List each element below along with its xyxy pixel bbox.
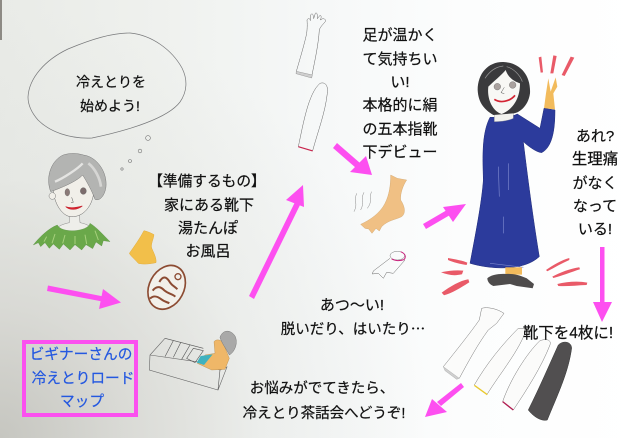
heading: things to prepare: 【準備するもの】 [148,173,266,190]
illustration: toe sock with red cuff [372,251,405,278]
text: feet are warm: い! [390,74,410,91]
title text: マップ [60,393,104,410]
text: the period pain is gone: なって [573,198,617,215]
arrow: up to five-toe socks [249,185,304,299]
title text: 冷えとりロード [32,370,134,387]
text: tea party invitation [243,380,405,422]
illustration: woman in blue dress making a V sign [470,62,557,288]
five-toe silk sock [443,308,504,379]
list of items: お風呂 [185,243,231,260]
text: hot, taking off and putting on [281,297,425,339]
text: feet are warm: の五本指靴 [362,121,438,138]
bubble text: 冷えとりを [76,74,146,90]
text: the period pain is gone: いる! [578,221,612,238]
text: the period pain is gone [572,128,618,238]
bubble text: 始めよう! [80,98,140,114]
text: feet are warm: 足が温かく [362,27,438,44]
icon: yellow sock [129,231,156,264]
list of items [164,197,254,260]
illustration: bare foot [354,175,407,233]
sock with yellow hem [474,328,527,395]
text: feet are warm [362,27,438,161]
list of items: 湯たんぽ [178,220,238,237]
text: hot, taking off and putting on: あつ〜い! [320,297,384,314]
text: the period pain is gone: がなく [572,175,618,192]
illustration: woman with gray hair and green top [33,153,110,250]
text: the period pain is gone: あれ? [576,128,614,145]
text: tea party invitation: お悩みがでてきたら、 [250,380,394,397]
text: hot, taking off and putting on: 脱いだり、はいたり… [281,318,425,339]
arrow: to the tea party [425,383,464,417]
text: four layers of socks: 靴下を4枚に! [523,324,613,342]
illustration: five-toe sock [296,13,326,78]
arrow: down to four socks [593,247,612,322]
black sock [528,342,572,420]
thought bubble [28,33,186,170]
text: feet are warm: 本格的に絹 [362,97,438,114]
motion lines: around the raised hand [539,55,574,76]
photo edge at top-left [0,0,2,40]
bubble text [76,74,146,114]
list of items: 家にある靴下 [164,197,254,214]
heading: things to prepare [148,173,266,260]
text: feet are warm: 下デビュー [362,143,438,161]
title text [30,346,134,410]
illustration: four socks [443,308,572,420]
icon: hot water bottle [141,259,193,316]
arrow: to the foot [333,143,372,175]
road map title box [24,342,136,415]
text: tea party invitation: 冷えとり茶話会へどうぞ! [243,405,405,422]
title text: ビギナーさんの [30,346,132,363]
illustration: person in bath [149,331,236,390]
text: feet are warm: て気持ちい [362,51,438,68]
arrow: to the woman in blue [423,204,466,229]
illustration: plain sock with red hem [298,83,328,151]
text: the period pain is gone: 生理痛 [572,150,618,168]
sock with red hem [503,340,550,410]
arrow: to the bath [47,286,121,309]
motion lines: around the feet [441,258,587,295]
